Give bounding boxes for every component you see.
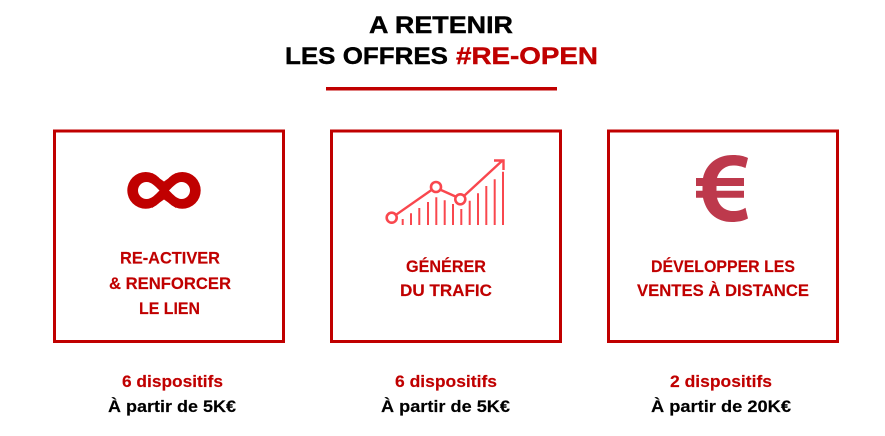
offer 1 details: 6 dispositifs: [122, 373, 223, 391]
heading: developper les ventes: [637, 257, 809, 300]
heading: re-activer: RE-ACTIVER: [120, 250, 220, 268]
heading: generer du trafic: DU TRAFIC: [400, 282, 492, 300]
offer 2 details: [381, 373, 510, 416]
offer 1 details: [108, 373, 236, 416]
title: LES OFFRES: [285, 43, 448, 70]
title: [285, 12, 598, 70]
offer 1 details: À partir de 5K€: [108, 397, 236, 416]
offer 3 details: 2 dispositifs: [670, 373, 772, 391]
heading: re-activer: [109, 250, 231, 318]
icon: euro: [696, 155, 748, 222]
panel: generer du trafic: [332, 131, 560, 342]
offer 3 details: À partir de 20K€: [651, 397, 791, 416]
title: A RETENIR: [369, 12, 513, 39]
title underline: [326, 87, 557, 90]
offer 2 details: À partir de 5K€: [381, 397, 510, 416]
panel: re-activer: [54, 131, 284, 342]
offer 2 details: 6 dispositifs: [395, 373, 497, 391]
heading: developper les ventes: VENTES À DISTANCE: [637, 281, 809, 300]
heading: re-activer: & RENFORCER: [109, 275, 231, 293]
heading: generer du trafic: GÉNÉRER: [406, 257, 486, 276]
icon: infinity: [127, 172, 201, 209]
offer 3 details: [651, 373, 791, 416]
icon: rising chart: [387, 160, 504, 225]
heading: re-activer: LE LIEN: [139, 300, 200, 318]
panel: developper les ventes: [608, 131, 838, 342]
heading: generer du trafic: [400, 257, 492, 300]
title: #RE-OPEN: [456, 43, 598, 70]
heading: developper les ventes: DÉVELOPPER LES: [651, 257, 795, 276]
